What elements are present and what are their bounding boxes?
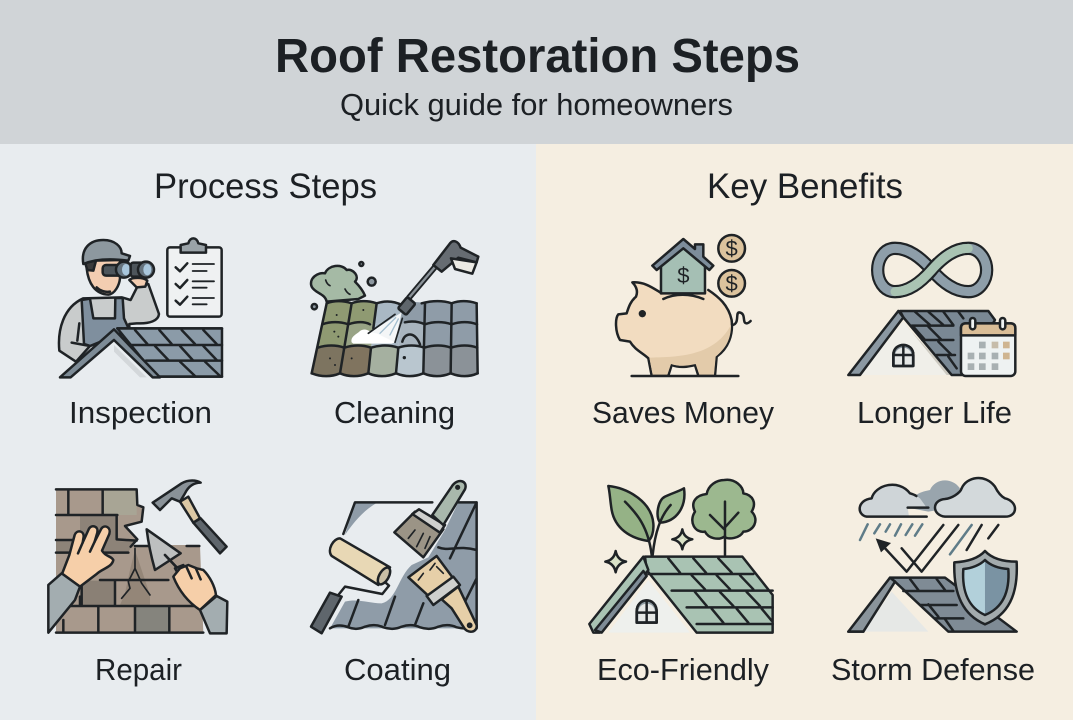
panel: header bbox=[0, 0, 1073, 144]
label: saves money: Saves Money bbox=[592, 396, 775, 430]
label: longer life: Longer Life bbox=[857, 396, 1012, 430]
icon: cleaning bbox=[311, 241, 478, 376]
title: Roof Restoration Steps bbox=[275, 30, 800, 83]
label: storm defense: Storm Defense bbox=[831, 653, 1035, 687]
label: repair: Repair bbox=[95, 653, 182, 687]
icon: inspection bbox=[59, 238, 222, 377]
icon: saves money: $ bbox=[677, 263, 689, 288]
icon: repair bbox=[48, 480, 227, 633]
panel: process steps bbox=[0, 144, 536, 720]
icon: eco-friendly bbox=[589, 480, 773, 633]
icon: longer life bbox=[848, 248, 1015, 376]
label: inspection: Inspection bbox=[69, 396, 212, 430]
icon: coating bbox=[311, 481, 477, 633]
icon: storm defense bbox=[848, 478, 1017, 632]
icon: saves money bbox=[616, 235, 751, 376]
label: cleaning: Cleaning bbox=[334, 396, 455, 430]
label: coating: Coating bbox=[344, 653, 451, 687]
heading: process steps: Process Steps bbox=[154, 167, 377, 206]
panel: key benefits bbox=[536, 144, 1073, 720]
icon: saves money: $ bbox=[726, 236, 738, 261]
label: eco-friendly: Eco-Friendly bbox=[597, 653, 770, 687]
heading: key benefits: Key Benefits bbox=[707, 167, 903, 206]
icon: saves money: $ bbox=[726, 271, 738, 296]
subtitle: Quick guide for homeowners bbox=[340, 87, 733, 122]
